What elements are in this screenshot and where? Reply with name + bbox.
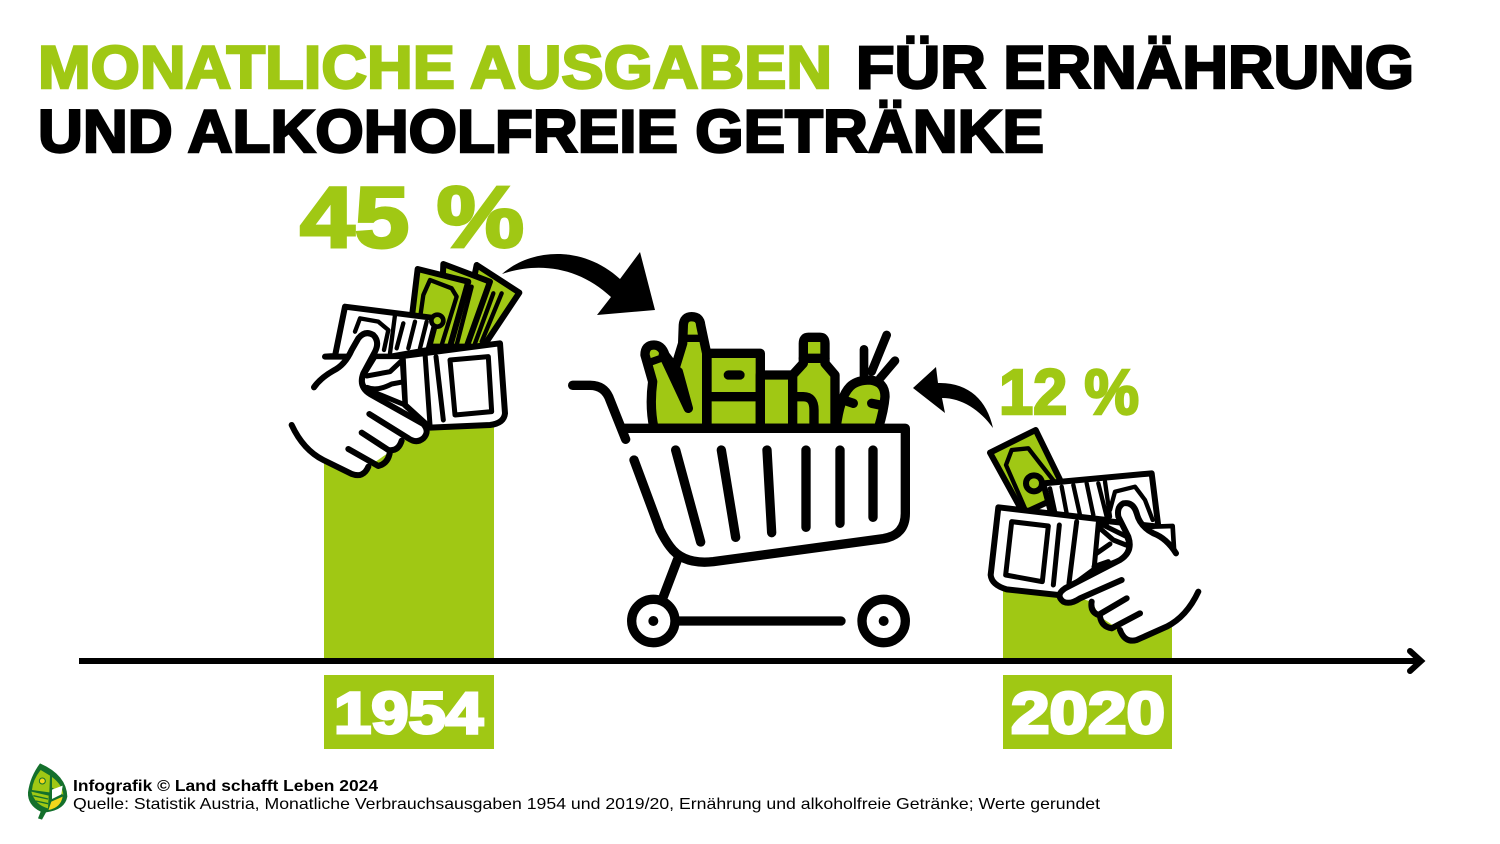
wallet	[403, 343, 505, 428]
year label: 2020	[1003, 675, 1172, 749]
icon: shopping cart	[573, 317, 905, 643]
bar: 1954	[324, 420, 494, 658]
bar: 2020	[1003, 590, 1172, 658]
year label: 1954	[324, 675, 494, 749]
footer source: Quelle: Statistik Austria, Monatliche Verbrauchsausgaben 1954 und 2019/20, Ernährung und alkoholfreie Getränke; Werte gerundet	[73, 796, 1101, 813]
banknote in hand	[362, 357, 405, 405]
logo: leaf	[28, 763, 67, 820]
title: MONATLICHE AUSGABEN	[38, 34, 832, 101]
footer credit: Infografik © Land schafft Leben 2024	[73, 778, 378, 795]
white banknotes	[325, 307, 443, 357]
icon: hand with wallet 2020	[990, 430, 1198, 641]
basket	[623, 428, 905, 562]
value: 45 %: 45 %	[300, 170, 524, 266]
green banknotes	[408, 264, 519, 347]
groceries	[645, 317, 895, 428]
white banknotes	[1043, 473, 1174, 548]
title: UND ALKOHOLFREIE GETRÄNKE	[38, 98, 1044, 165]
arrow: 12 % to cart	[913, 367, 993, 428]
year label: 1954: 1954	[334, 681, 483, 746]
wallet	[991, 507, 1107, 595]
wheels	[663, 560, 841, 621]
icon: hand with wallet 1954	[292, 264, 519, 475]
title: FÜR ERNÄHRUNG	[856, 34, 1414, 101]
banknote in hand	[1094, 523, 1129, 570]
time axis arrow	[79, 651, 1421, 671]
title	[38, 34, 1414, 165]
green banknote	[990, 430, 1067, 513]
arrow: 45 % to cart	[502, 252, 655, 315]
value: 12 %: 12 %	[999, 356, 1139, 428]
hand	[292, 333, 427, 475]
hand	[1060, 503, 1198, 641]
year label: 2020: 2020	[1011, 681, 1165, 746]
